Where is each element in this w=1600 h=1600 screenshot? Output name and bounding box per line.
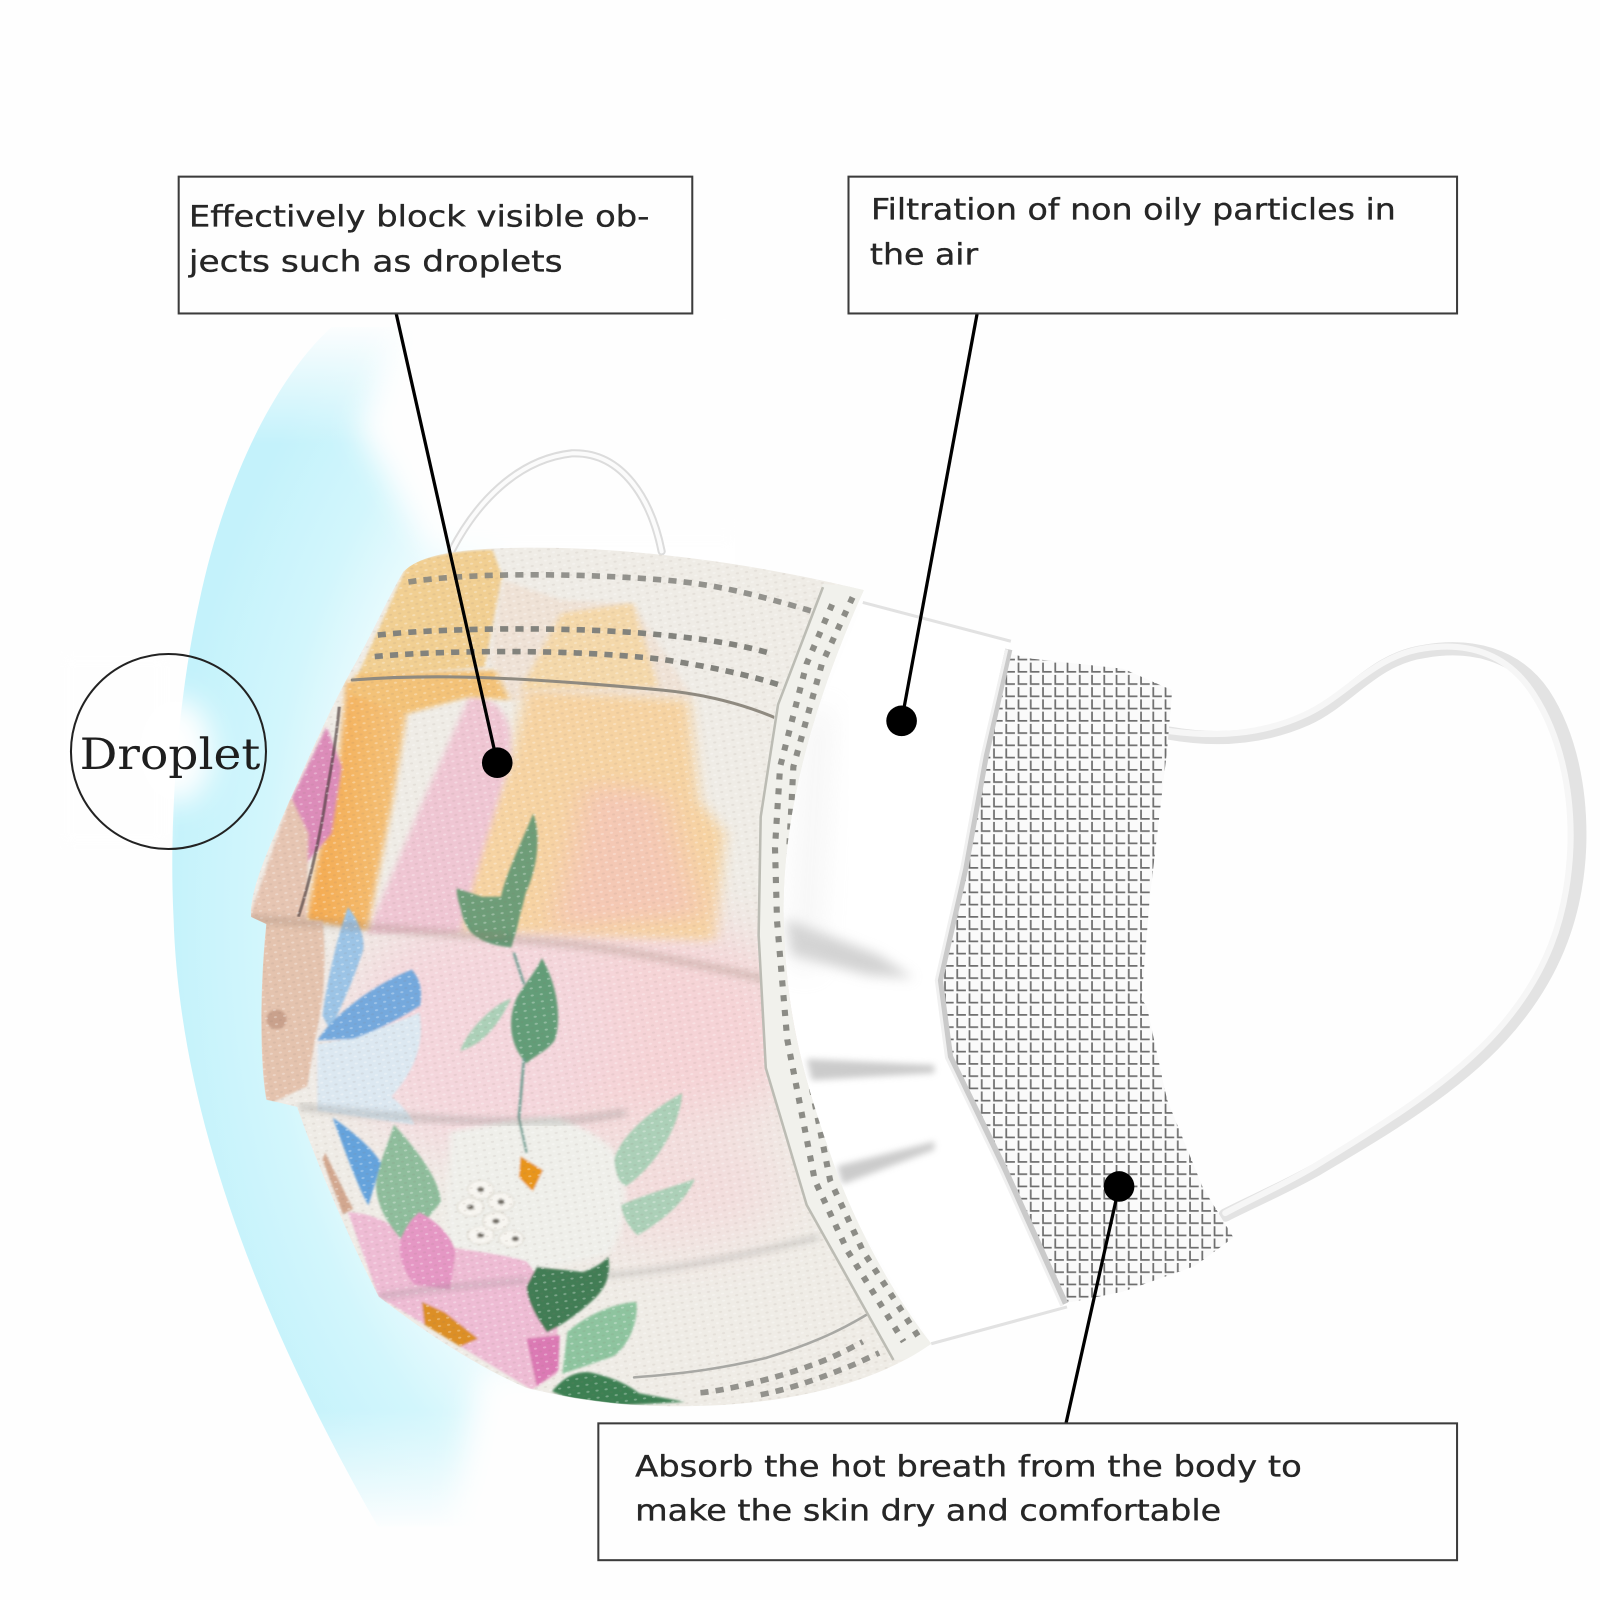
leader line and dot: droplets layer: [396, 313, 513, 778]
pleat folds: [251, 677, 866, 1377]
outer printed mask layer: [245, 541, 939, 1419]
leader line and dot: absorption layer: [1066, 1171, 1134, 1423]
top and bottom stitch rows: [375, 575, 879, 1395]
blue protective crescent: [61, 296, 756, 1542]
mesh inner layer: [935, 648, 1233, 1306]
callout: filtration: [849, 177, 1457, 313]
inner white panel with pleat shadows: [776, 602, 1067, 1344]
callout: absorb breath: [598, 1423, 1457, 1560]
callout: block droplets: Effectively block visible ob-: [189, 200, 649, 234]
callout: filtration: Filtration of non oily particles in: [871, 193, 1396, 227]
callout: block droplets: jects such as droplets: [188, 245, 563, 279]
droplet label circle: Droplet: [80, 730, 260, 780]
top ear loop: [451, 453, 662, 551]
right ear loop: [1169, 647, 1580, 1215]
callout: absorb breath: Absorb the hot breath from the body to: [635, 1449, 1302, 1483]
fabric texture: [245, 541, 939, 1419]
watercolor wash: [245, 550, 807, 1246]
droplet label circle: [71, 654, 266, 849]
stitched edge band: [757, 586, 929, 1360]
leader line and dot: filtration layer: [886, 313, 977, 736]
callout: filtration: the air: [870, 237, 979, 271]
callout: absorb breath: make the skin dry and comfortable: [635, 1493, 1221, 1527]
floral print: [251, 813, 695, 1407]
callout: block droplets: [179, 177, 692, 313]
